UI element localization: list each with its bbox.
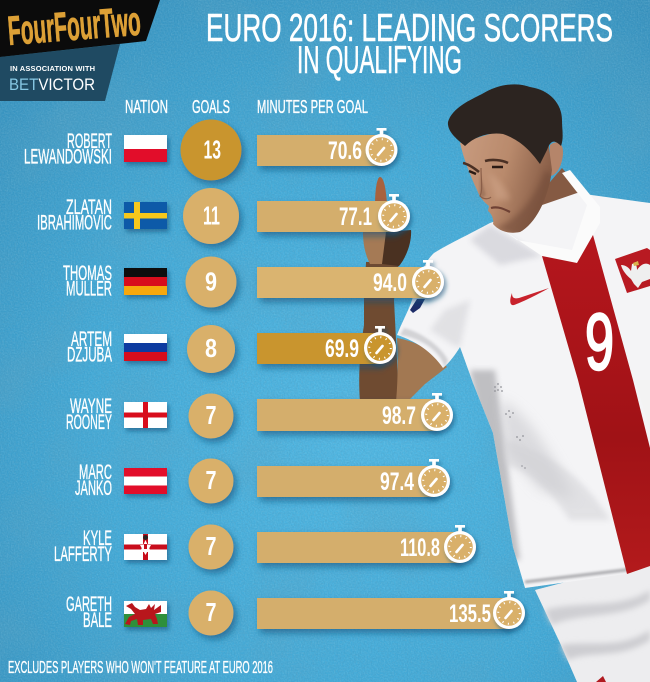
minutes bar [257, 333, 380, 364]
name: ZLATAN [66, 196, 112, 219]
player arm and raised finger [359, 177, 447, 402]
goals circle: 7 [206, 465, 216, 495]
goals circle: 11 [203, 200, 220, 230]
name: LEWANDOWSKI [24, 146, 112, 168]
stopwatch icon [366, 128, 398, 166]
row: Zlatan Ibrahimovic [37, 188, 410, 244]
flag: Russia [124, 334, 167, 361]
minutes bar: 110.8 [400, 534, 440, 562]
stopwatch icon [364, 326, 396, 364]
minutes bar: 94.0 [373, 269, 407, 297]
sponsor line: IN ASSOCIATION WITH [10, 64, 95, 73]
goals circle [187, 325, 235, 373]
player head [448, 84, 563, 240]
name: IBRAHIMOVIC [37, 212, 112, 234]
name: ARTEM [71, 328, 112, 351]
name: THOMAS [63, 262, 112, 285]
column headers: MINUTES PER GOAL [257, 96, 368, 117]
minutes bar [257, 532, 460, 563]
name: MARC [79, 461, 112, 484]
crest: Polish eagle [615, 248, 650, 293]
player neck [513, 168, 590, 256]
name [63, 262, 112, 300]
stopwatch icon [421, 393, 453, 431]
goals circle: 7 [206, 597, 216, 627]
row: Marc Janko [75, 458, 450, 504]
jersey side white stripe [635, 380, 650, 430]
stopwatch icon [412, 260, 444, 298]
minutes bar: 70.6 [328, 137, 362, 165]
minutes bar [257, 201, 394, 232]
minutes bar: 98.7 [382, 402, 416, 430]
name [67, 328, 112, 366]
goals circle [180, 120, 242, 180]
column headers: NATION [125, 96, 168, 117]
goals circle [188, 394, 234, 438]
name [24, 130, 112, 168]
row: Artem Dzjuba [67, 325, 396, 373]
flag: England [124, 402, 167, 428]
jersey mesh panels [494, 383, 526, 469]
goals circle: 8 [205, 333, 217, 363]
minutes bar [257, 135, 382, 166]
row: Gareth Bale [66, 590, 525, 636]
name: BALE [83, 609, 112, 632]
minutes bar: 69.9 [325, 335, 359, 363]
flag: Poland [124, 135, 167, 162]
minutes bar [257, 267, 428, 298]
stopwatch icon [418, 459, 450, 497]
stopwatch icon [444, 525, 476, 563]
minutes bar [257, 598, 509, 629]
minutes bar [257, 399, 437, 431]
title: IN QUALIFYING [297, 39, 462, 82]
minutes bar: 97.4 [380, 468, 414, 496]
column headers: GOALS [192, 96, 230, 117]
name [66, 395, 112, 434]
goals circle [183, 188, 239, 244]
name [66, 593, 112, 632]
name: ROBERT [67, 130, 112, 153]
goals circle [188, 458, 234, 504]
europa badge [410, 299, 425, 313]
flag: Wales [124, 601, 167, 627]
name: ROONEY [66, 411, 112, 434]
minutes bar: 135.5 [449, 600, 491, 628]
player jersey [397, 170, 650, 588]
goals circle: 9 [205, 266, 217, 296]
name: LAFFERTY [54, 543, 112, 566]
flag: Austria [124, 468, 167, 494]
name: DZJUBA [67, 344, 112, 366]
name: MULLER [66, 278, 112, 300]
player photo: Robert Lewandowski [359, 84, 650, 682]
minutes bar: 77.1 [339, 203, 372, 231]
row: Wayne Rooney [66, 393, 453, 438]
goals circle [188, 524, 234, 570]
goals circle [188, 590, 234, 636]
FourFourTwo logo banner [0, 0, 160, 101]
name: WAYNE [70, 395, 112, 418]
title [206, 7, 613, 82]
goals circle [186, 256, 236, 308]
flag: Sweden [124, 202, 167, 229]
name [54, 527, 112, 566]
footnote: EXCLUDES PLAYERS WHO WON'T FEATURE AT EURO 2016 [8, 657, 273, 677]
minutes bar [257, 466, 434, 497]
sponsor logo: BetVictor: BETVICTOR [9, 76, 95, 94]
row: Thomas Muller [63, 256, 444, 308]
name: JANKO [75, 477, 112, 500]
flag: Germany [124, 268, 167, 295]
name: KYLE [83, 527, 112, 550]
name [37, 196, 112, 234]
shirt number 9: 9 [585, 297, 614, 386]
stopwatch icon [493, 591, 525, 629]
goals circle: 7 [206, 400, 216, 430]
name [75, 461, 112, 500]
jersey collar [493, 170, 600, 263]
flag: Northern Ireland [124, 534, 167, 560]
row: Kyle Lafferty [54, 524, 476, 570]
jersey red stripe [542, 235, 650, 574]
column headers [125, 96, 368, 117]
player shorts [535, 560, 650, 682]
goals circle: 13 [204, 134, 221, 164]
nike swoosh [510, 288, 549, 305]
name: GARETH [66, 593, 112, 616]
stopwatch icon [378, 194, 410, 232]
goals circle: 7 [206, 531, 216, 561]
row: Robert Lewandowski [24, 120, 398, 180]
